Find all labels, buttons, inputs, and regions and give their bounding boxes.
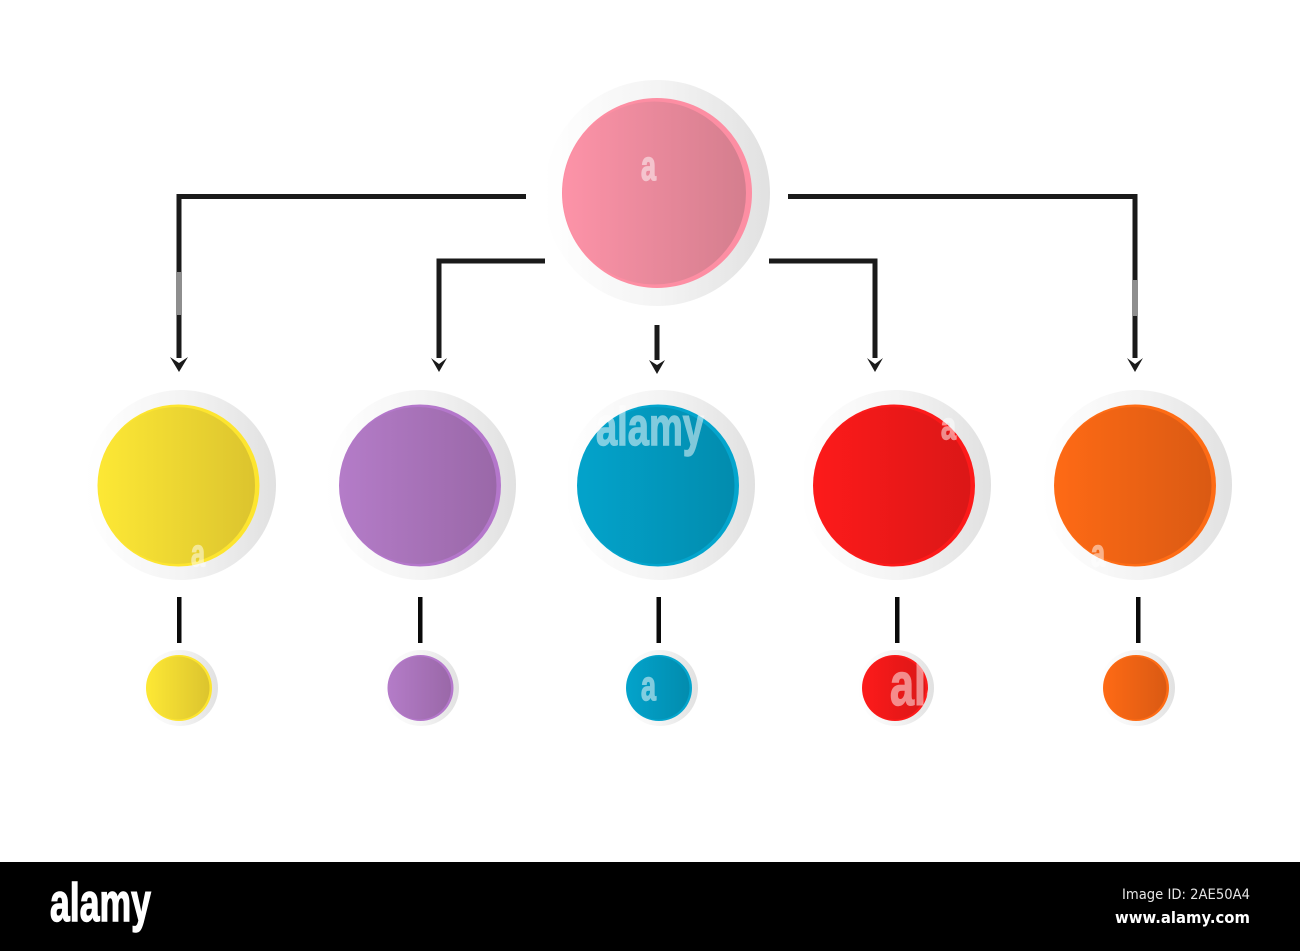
small circle: blue (622, 650, 698, 726)
connector: top circle to yellow (170, 196, 526, 372)
footer bar (0, 862, 1300, 951)
website url: www.alamy.com (1115, 908, 1250, 927)
small circle: purple (383, 650, 459, 726)
large circle: yellow: a (191, 533, 206, 575)
large circle: orange: a (1091, 533, 1106, 575)
stem: red (895, 597, 900, 643)
connector: top circle to purple (431, 261, 545, 372)
stem: purple (418, 597, 422, 643)
large circle: yellow (86, 390, 276, 580)
small circle: yellow (142, 650, 218, 726)
large circle: purple (326, 390, 516, 580)
connector: top circle to blue (649, 325, 665, 374)
top circle: pink (544, 80, 770, 306)
small circle: blue: a (641, 662, 656, 709)
stem: orange (1136, 597, 1140, 643)
large circle: orange (1042, 390, 1232, 580)
large circle: blue: alamy (596, 397, 704, 457)
top circle: pink: a (641, 142, 656, 189)
stem: blue (656, 597, 661, 643)
large circle: blue (565, 390, 755, 580)
stem: yellow (177, 597, 182, 643)
large circle: red (801, 390, 991, 580)
connector: top circle to red (769, 261, 883, 372)
large circle: red: a (941, 406, 957, 448)
image id: Image ID: 2AE50A4 (1122, 887, 1250, 903)
connector: top circle to orange (788, 196, 1143, 372)
footer logo: alamy (50, 873, 151, 933)
small circle: red: ala (890, 651, 950, 718)
small circle: red (862, 650, 934, 726)
small circle: orange (1099, 650, 1175, 726)
